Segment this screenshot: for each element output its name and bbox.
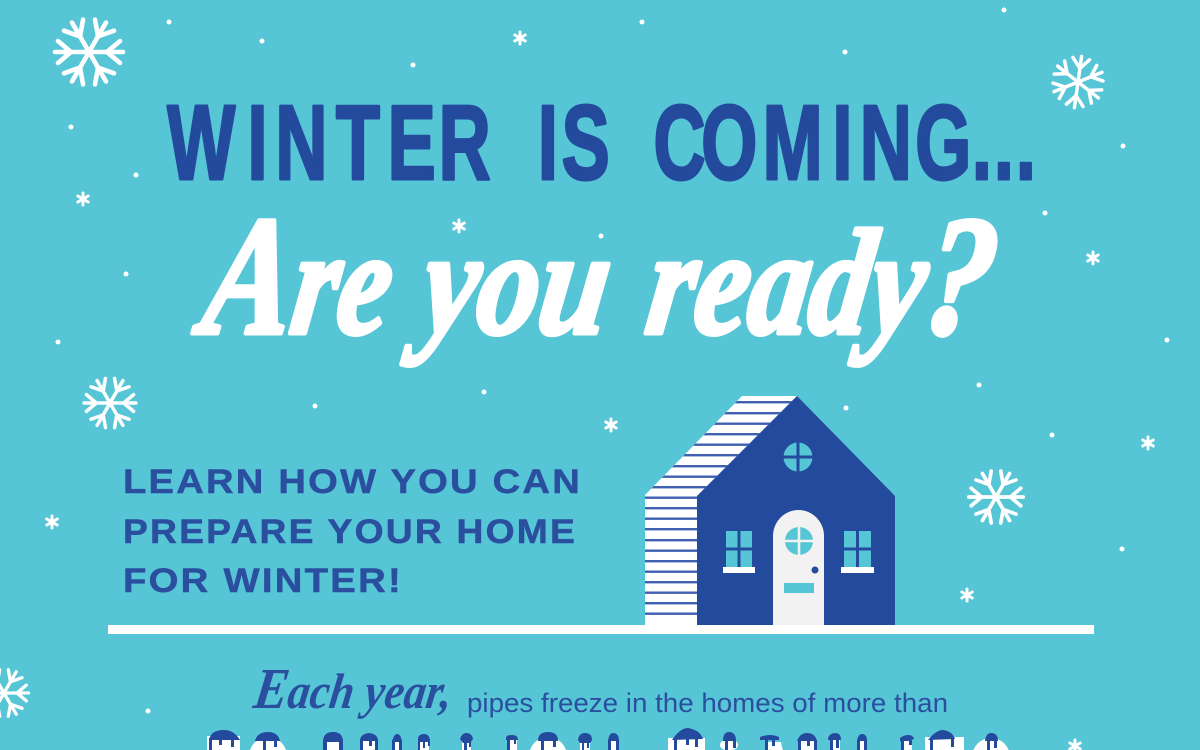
subtitle: Are you ready: you — [400, 200, 622, 366]
right window — [841, 531, 874, 573]
call to action text — [123, 463, 582, 600]
subtitle: Are you ready: Are — [187, 182, 406, 370]
house front — [697, 396, 895, 625]
call to action text: FOR WINTER! — [123, 562, 403, 600]
frozen numerals row cropped at bottom edge — [207, 728, 1010, 750]
subtitle: Are you ready — [187, 182, 1009, 370]
house side siding — [640, 390, 800, 630]
title: Winter is coming: WINTER IS COMING... — [167, 84, 1036, 202]
call to action text: PREPARE YOUR HOME — [123, 513, 577, 551]
statistic intro text: pipes freeze in the homes of more than — [467, 688, 948, 718]
left window — [723, 531, 755, 573]
subtitle: Are you ready: ready? — [638, 182, 1009, 370]
ground line — [108, 625, 1094, 634]
statistic intro text — [249, 656, 948, 721]
icon: house — [640, 390, 895, 630]
call to action text: LEARN HOW YOU CAN — [123, 463, 582, 501]
door — [773, 510, 824, 625]
statistic intro text: Each year, — [249, 656, 457, 721]
attic window — [783, 442, 813, 472]
